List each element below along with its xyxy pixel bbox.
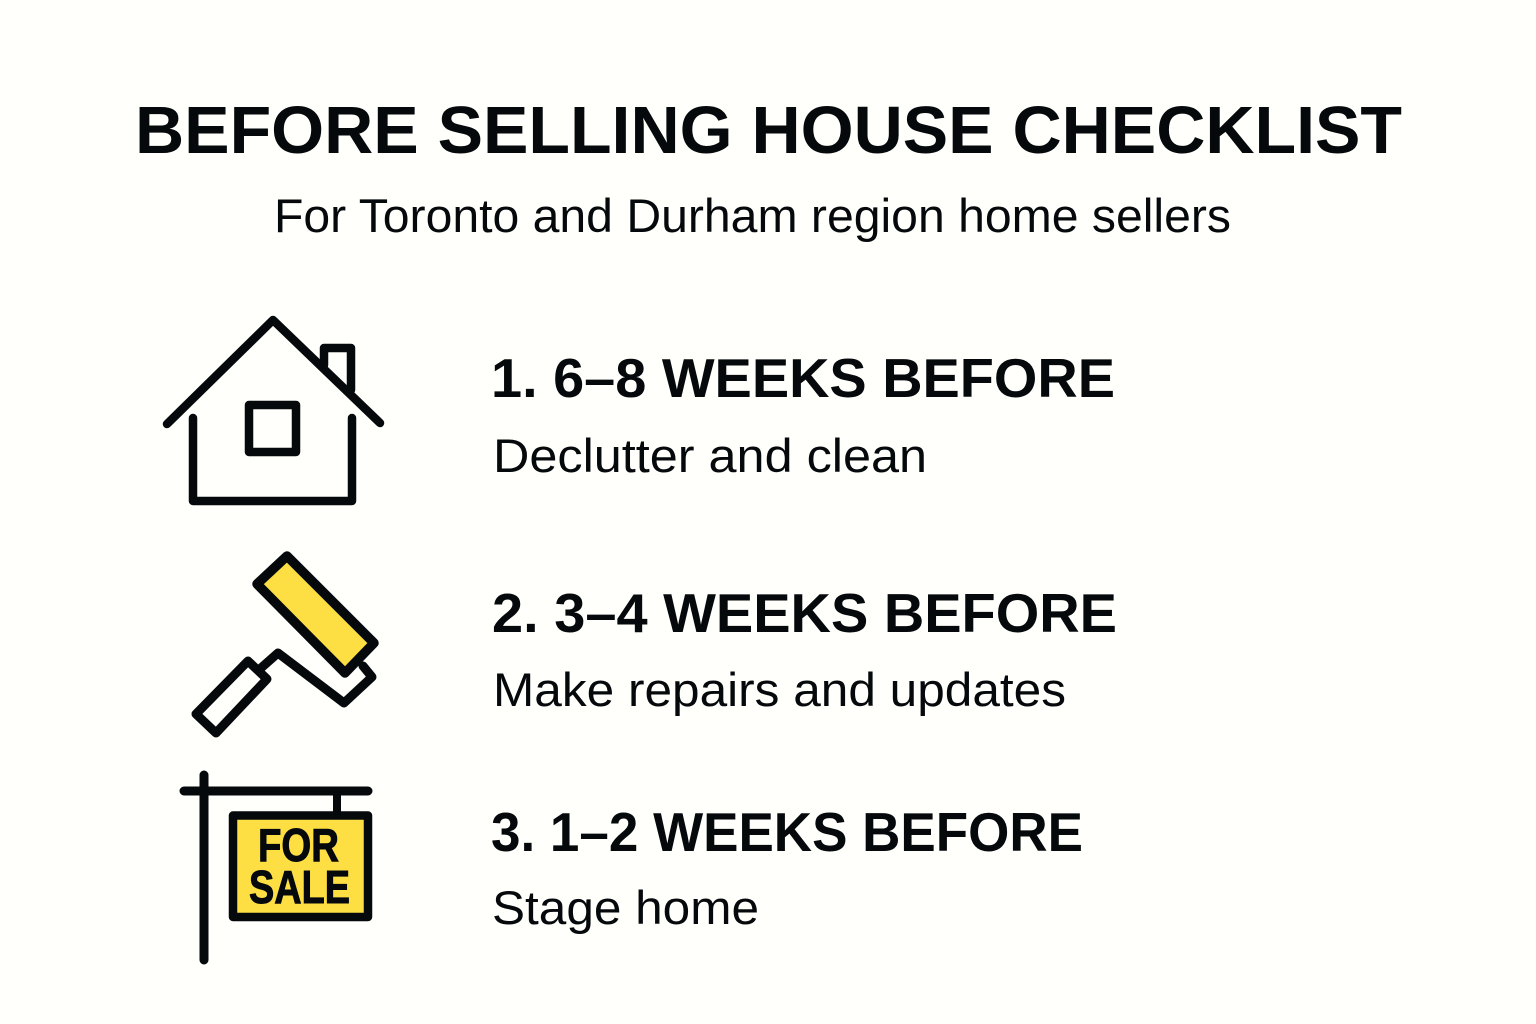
step 1 description: Declutter and clean: [493, 429, 927, 482]
title: BEFORE SELLING HOUSE CHECKLIST: [135, 93, 1402, 168]
step 1 heading: 1. 6–8 WEEKS BEFORE: [491, 347, 1115, 409]
sign text: for: FOR: [258, 819, 339, 871]
icon: paint roller: [196, 556, 374, 733]
step 3 description: Stage home: [492, 881, 759, 934]
step 2 heading: 2. 3–4 WEEKS BEFORE: [492, 582, 1117, 644]
subtitle: For Toronto and Durham region home sellers: [274, 189, 1231, 242]
sign text: sale: SALE: [249, 861, 350, 913]
step 2 description: Make repairs and updates: [493, 663, 1066, 716]
icon: for sale sign: [184, 775, 368, 960]
icon: house: [167, 320, 380, 501]
step 3 heading: 3. 1–2 WEEKS BEFORE: [491, 801, 1083, 863]
